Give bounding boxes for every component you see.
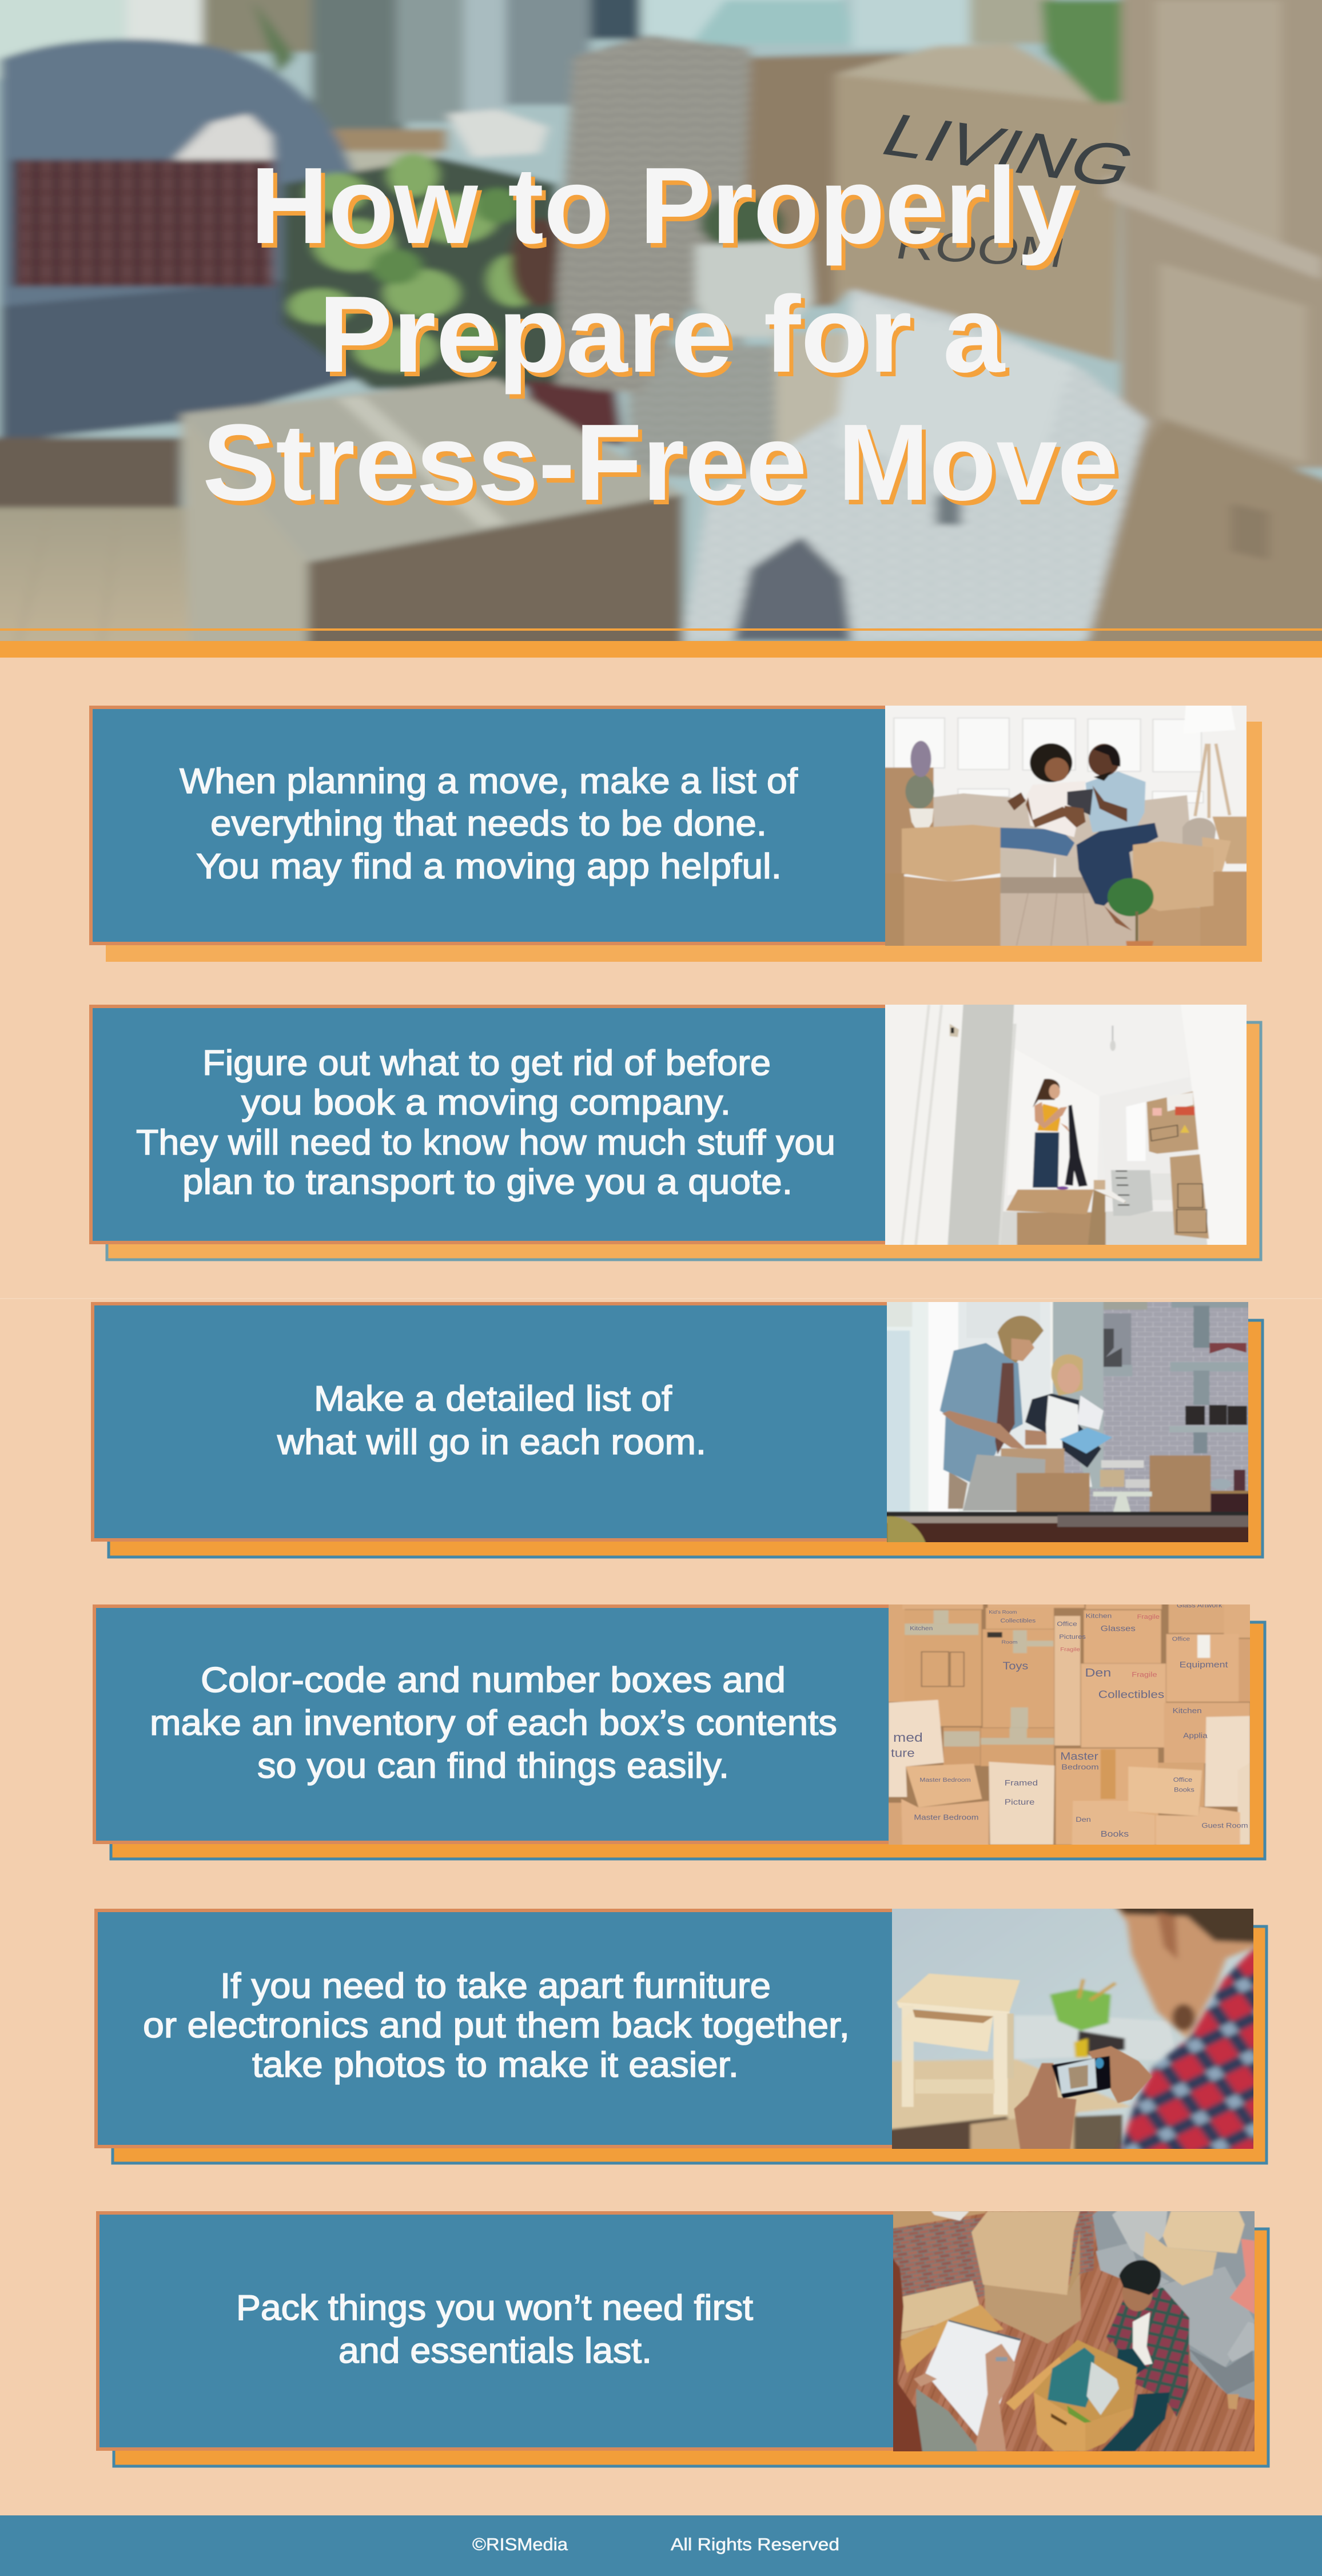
handwritten box labels: Pictures [1059, 1633, 1086, 1641]
handwritten box labels: Master Bedroom [914, 1813, 979, 1821]
step text [180, 762, 798, 886]
step text [143, 1966, 850, 2085]
text box [91, 1006, 887, 1243]
text box [91, 707, 887, 943]
photo: man packing box with clipboard [893, 2211, 1255, 2451]
handwritten box labels: Equipment [1180, 1660, 1228, 1670]
box lettering: LIVING [870, 101, 1148, 200]
handwritten box labels: Glass Artwork [1177, 1602, 1222, 1609]
front box [181, 379, 683, 562]
right boxes [1146, 1092, 1198, 1154]
offset shadow [111, 1622, 1265, 1859]
text box [98, 2213, 895, 2449]
text box [93, 1304, 889, 1540]
panel: step 1, make a list [91, 700, 1262, 962]
footer credit: ©RISMedia [472, 2534, 568, 2554]
boxes behind [742, 53, 910, 306]
clipboard [925, 2320, 1021, 2446]
offset shadow [114, 2229, 1268, 2466]
handwritten box labels: Fragile [1060, 1647, 1080, 1653]
box lettering: ROOM [892, 221, 1069, 276]
step text: you book a moving company. [241, 1083, 731, 1122]
handwritten box labels: Glasses [1101, 1625, 1136, 1633]
photo: couple checking boxes in kitchen [887, 1302, 1248, 1542]
flat cardboard [898, 2281, 982, 2333]
photo: couple on sofa with boxes [885, 706, 1247, 946]
stool [897, 1973, 1020, 2012]
plant [282, 157, 561, 389]
step text: If you need to take apart furniture [220, 1966, 771, 2006]
text box [96, 1910, 894, 2147]
title: Prepare for a [318, 274, 1005, 395]
step text: and essentials last. [339, 2331, 652, 2371]
step text: plan to transport to give you a quote. [182, 1162, 793, 1202]
handwritten box labels: Collectibles [1098, 1689, 1164, 1701]
man [1113, 1903, 1265, 2156]
header photo: living room with moving boxes [0, 0, 1322, 641]
handwritten box labels: Office [1172, 1636, 1190, 1642]
panel: step 5, take photos [96, 1903, 1267, 2163]
title [202, 145, 1118, 523]
handwritten box labels: Fragile [1132, 1671, 1157, 1678]
step text: Figure out what to get rid of before [202, 1044, 771, 1083]
photo: man photographing stool with phone [892, 1909, 1253, 2149]
counter [880, 1512, 1256, 1518]
photo: woman sorting clothes into box [885, 1005, 1247, 1245]
step text: Make a detailed list of [314, 1379, 672, 1419]
handwritten box labels: Picture [1005, 1798, 1034, 1807]
right stack [1121, 0, 1322, 468]
handwritten box labels: Room [1002, 1639, 1017, 1645]
woman [974, 2344, 1016, 2451]
handwritten box labels: ture [891, 1747, 915, 1759]
step text: You may find a moving app helpful. [196, 847, 782, 886]
open box [1034, 2340, 1137, 2423]
faint seam line [0, 1298, 1322, 1299]
handwritten box labels: Office [1173, 1776, 1193, 1783]
handwritten box labels: Kid's Room [989, 1610, 1017, 1615]
boxes and laptop [1001, 1448, 1064, 1473]
open box [1017, 1212, 1106, 1247]
handwritten box labels: Framed [1005, 1779, 1038, 1787]
step text: or electronics and put them back together, [143, 2006, 850, 2045]
panel: step 2, get rid of stuff [91, 999, 1261, 1260]
text box [94, 1606, 890, 1842]
blanket [556, 35, 750, 394]
handwritten box labels: Kitchen [910, 1626, 933, 1632]
woman [1033, 1132, 1059, 1188]
step text [150, 1661, 837, 1786]
right boxes [1212, 817, 1254, 864]
handwritten box labels: Applia [1183, 1731, 1208, 1739]
step text: make an inventory of each box’s contents [150, 1703, 837, 1743]
handwritten box labels: Master Bedroom [919, 1777, 971, 1783]
step text: They will need to know how much stuff you [136, 1123, 835, 1162]
dresser [1111, 1170, 1153, 1216]
hands and phone [1014, 2063, 1076, 2155]
step text: everything that needs to be done. [210, 804, 767, 843]
handwritten box labels: Guest Room [1201, 1822, 1248, 1829]
step text: When planning a move, make a list of [180, 762, 798, 801]
handwritten box labels: Kitchen [1173, 1706, 1202, 1715]
header band: thick orange bar [0, 641, 1322, 658]
panel: step 3, room list [93, 1296, 1263, 1557]
handwritten box labels: Office [1057, 1620, 1077, 1627]
handwritten box labels: med [893, 1731, 923, 1745]
stacked boxes left [984, 2274, 1081, 2344]
man [948, 1472, 967, 1509]
step text [277, 1379, 706, 1462]
title: How to Properly [250, 145, 1077, 266]
handwritten box labels: Den [1076, 1815, 1091, 1823]
handwritten box labels: Bedroom [1061, 1763, 1099, 1771]
box lettering [870, 101, 1148, 276]
handwritten box labels: Kitchen [1086, 1612, 1112, 1619]
bubble wrap [776, 333, 869, 446]
title: Stress-Free Move [202, 402, 1118, 523]
handwritten box labels [891, 1602, 1248, 1839]
footer bar [0, 2515, 1322, 2576]
panel: step 6, packing order [98, 2205, 1268, 2466]
step text [136, 1044, 835, 1202]
offset shadow [107, 1022, 1261, 1260]
offset shadow [113, 1926, 1267, 2163]
offset shadow [106, 722, 1262, 962]
step text: Pack things you won’t need first [236, 2288, 753, 2328]
man [1106, 2287, 1189, 2417]
handwritten box labels: Den [1085, 1666, 1111, 1679]
step text [236, 2288, 753, 2371]
man [1086, 771, 1145, 833]
sofa [1093, 2205, 1262, 2402]
armchair [0, 39, 364, 442]
offset shadow [109, 1320, 1263, 1557]
handwritten box labels: Books [1174, 1786, 1194, 1793]
step text: what will go in each room. [277, 1423, 706, 1462]
woman [1001, 827, 1074, 856]
footer rights: All Rights Reserved [671, 2534, 839, 2554]
photo: labelled stack of boxes [889, 1602, 1250, 1845]
handwritten box labels: Toys [1003, 1661, 1028, 1672]
handwritten box labels: Fragile [1137, 1613, 1160, 1621]
woman [1025, 1393, 1101, 1468]
step text: so you can find things easily. [257, 1746, 729, 1786]
stacked boxes right [1143, 2231, 1217, 2286]
header rule: thin orange line [0, 628, 1322, 631]
panel: step 4, color-code boxes [94, 1599, 1265, 1859]
handwritten box labels: Master [1060, 1751, 1098, 1762]
handwritten box labels: Books [1101, 1829, 1129, 1839]
handwritten box labels: Collectibles [1000, 1618, 1036, 1624]
step text: take photos to make it easier. [252, 2045, 739, 2085]
step text: Color-code and number boxes and [201, 1661, 786, 1700]
